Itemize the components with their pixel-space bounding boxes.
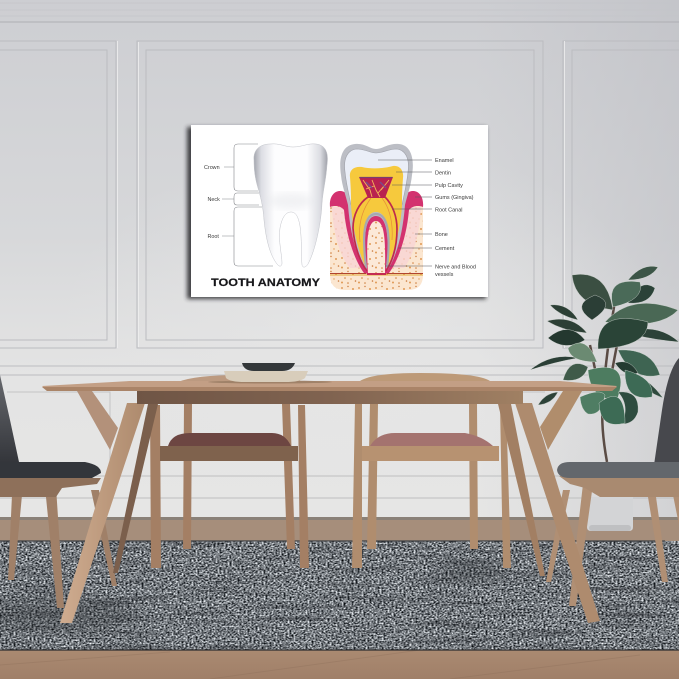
right labels: vessels xyxy=(435,272,454,278)
chair seat xyxy=(557,462,679,478)
chair legs xyxy=(150,404,309,568)
plant pot xyxy=(587,497,633,531)
potted plant xyxy=(530,266,679,531)
table back leg left xyxy=(113,404,158,573)
right labels: Gums (Gingiva) xyxy=(435,195,474,201)
gums and periodontal tissue xyxy=(330,191,423,274)
chair rail xyxy=(559,476,679,497)
root canals xyxy=(353,197,397,271)
wall background xyxy=(0,0,679,525)
poster sheet xyxy=(191,125,488,297)
left labels: Neck xyxy=(208,197,220,203)
dark chair left xyxy=(0,375,117,608)
cross-section tooth xyxy=(330,144,423,290)
right labels: Pulp Cavity xyxy=(435,183,463,189)
inner grey arch xyxy=(364,214,389,268)
right labels: Dentin xyxy=(435,170,451,176)
table brace right xyxy=(540,391,582,450)
chair rail xyxy=(362,446,499,461)
nerve and blood vessels xyxy=(330,274,423,275)
chair legs xyxy=(8,487,117,608)
chair seat xyxy=(370,433,493,446)
plant leaves xyxy=(530,266,679,424)
pulp cavity xyxy=(353,177,397,271)
back table chair left xyxy=(150,375,309,568)
chair rail xyxy=(160,446,298,461)
left labels xyxy=(204,165,220,240)
right labels: Bone xyxy=(435,232,448,238)
chair seat xyxy=(168,433,291,446)
dining table xyxy=(42,381,617,623)
grey chair right xyxy=(546,358,679,606)
dark bowl xyxy=(242,363,295,371)
icon: white tooth xyxy=(254,144,328,267)
pot base xyxy=(589,525,631,531)
right labels: Cement xyxy=(435,246,455,252)
table brace left xyxy=(77,391,118,450)
placemat xyxy=(208,380,332,384)
back table chair right xyxy=(352,373,511,568)
enamel and cement xyxy=(340,144,413,271)
chair back rest xyxy=(178,375,300,382)
left labels: Root xyxy=(208,234,219,240)
wood floor xyxy=(0,517,679,679)
anatomy brackets xyxy=(222,144,273,266)
right labels: Nerve and Blood xyxy=(435,264,476,270)
right labels xyxy=(435,158,476,278)
crown white layer xyxy=(345,149,408,205)
bone xyxy=(330,205,423,290)
table apron xyxy=(137,390,523,404)
table front leg right xyxy=(515,403,600,623)
table back leg right xyxy=(498,404,545,576)
right labels: Root Canal xyxy=(435,208,463,214)
chair back xyxy=(654,358,679,465)
table dishes xyxy=(208,363,332,384)
plate stack xyxy=(224,371,308,382)
callout leader lines xyxy=(378,160,432,266)
poster shadow xyxy=(187,127,486,299)
table top xyxy=(42,381,617,391)
heading: TOOTH ANATOMY xyxy=(211,277,321,289)
table front leg left xyxy=(60,403,145,623)
chair back xyxy=(0,375,19,462)
wall moulding panels xyxy=(0,3,679,498)
chair rail xyxy=(0,478,101,497)
chair legs xyxy=(546,484,679,606)
chair seat xyxy=(0,462,101,478)
left labels: Crown xyxy=(204,165,220,171)
chair back rest xyxy=(360,373,490,381)
rug xyxy=(0,541,679,650)
right labels: Enamel xyxy=(435,158,454,164)
dentin xyxy=(350,166,403,266)
plant stems xyxy=(590,295,617,462)
wall poster xyxy=(187,125,488,299)
chair legs xyxy=(352,403,511,568)
